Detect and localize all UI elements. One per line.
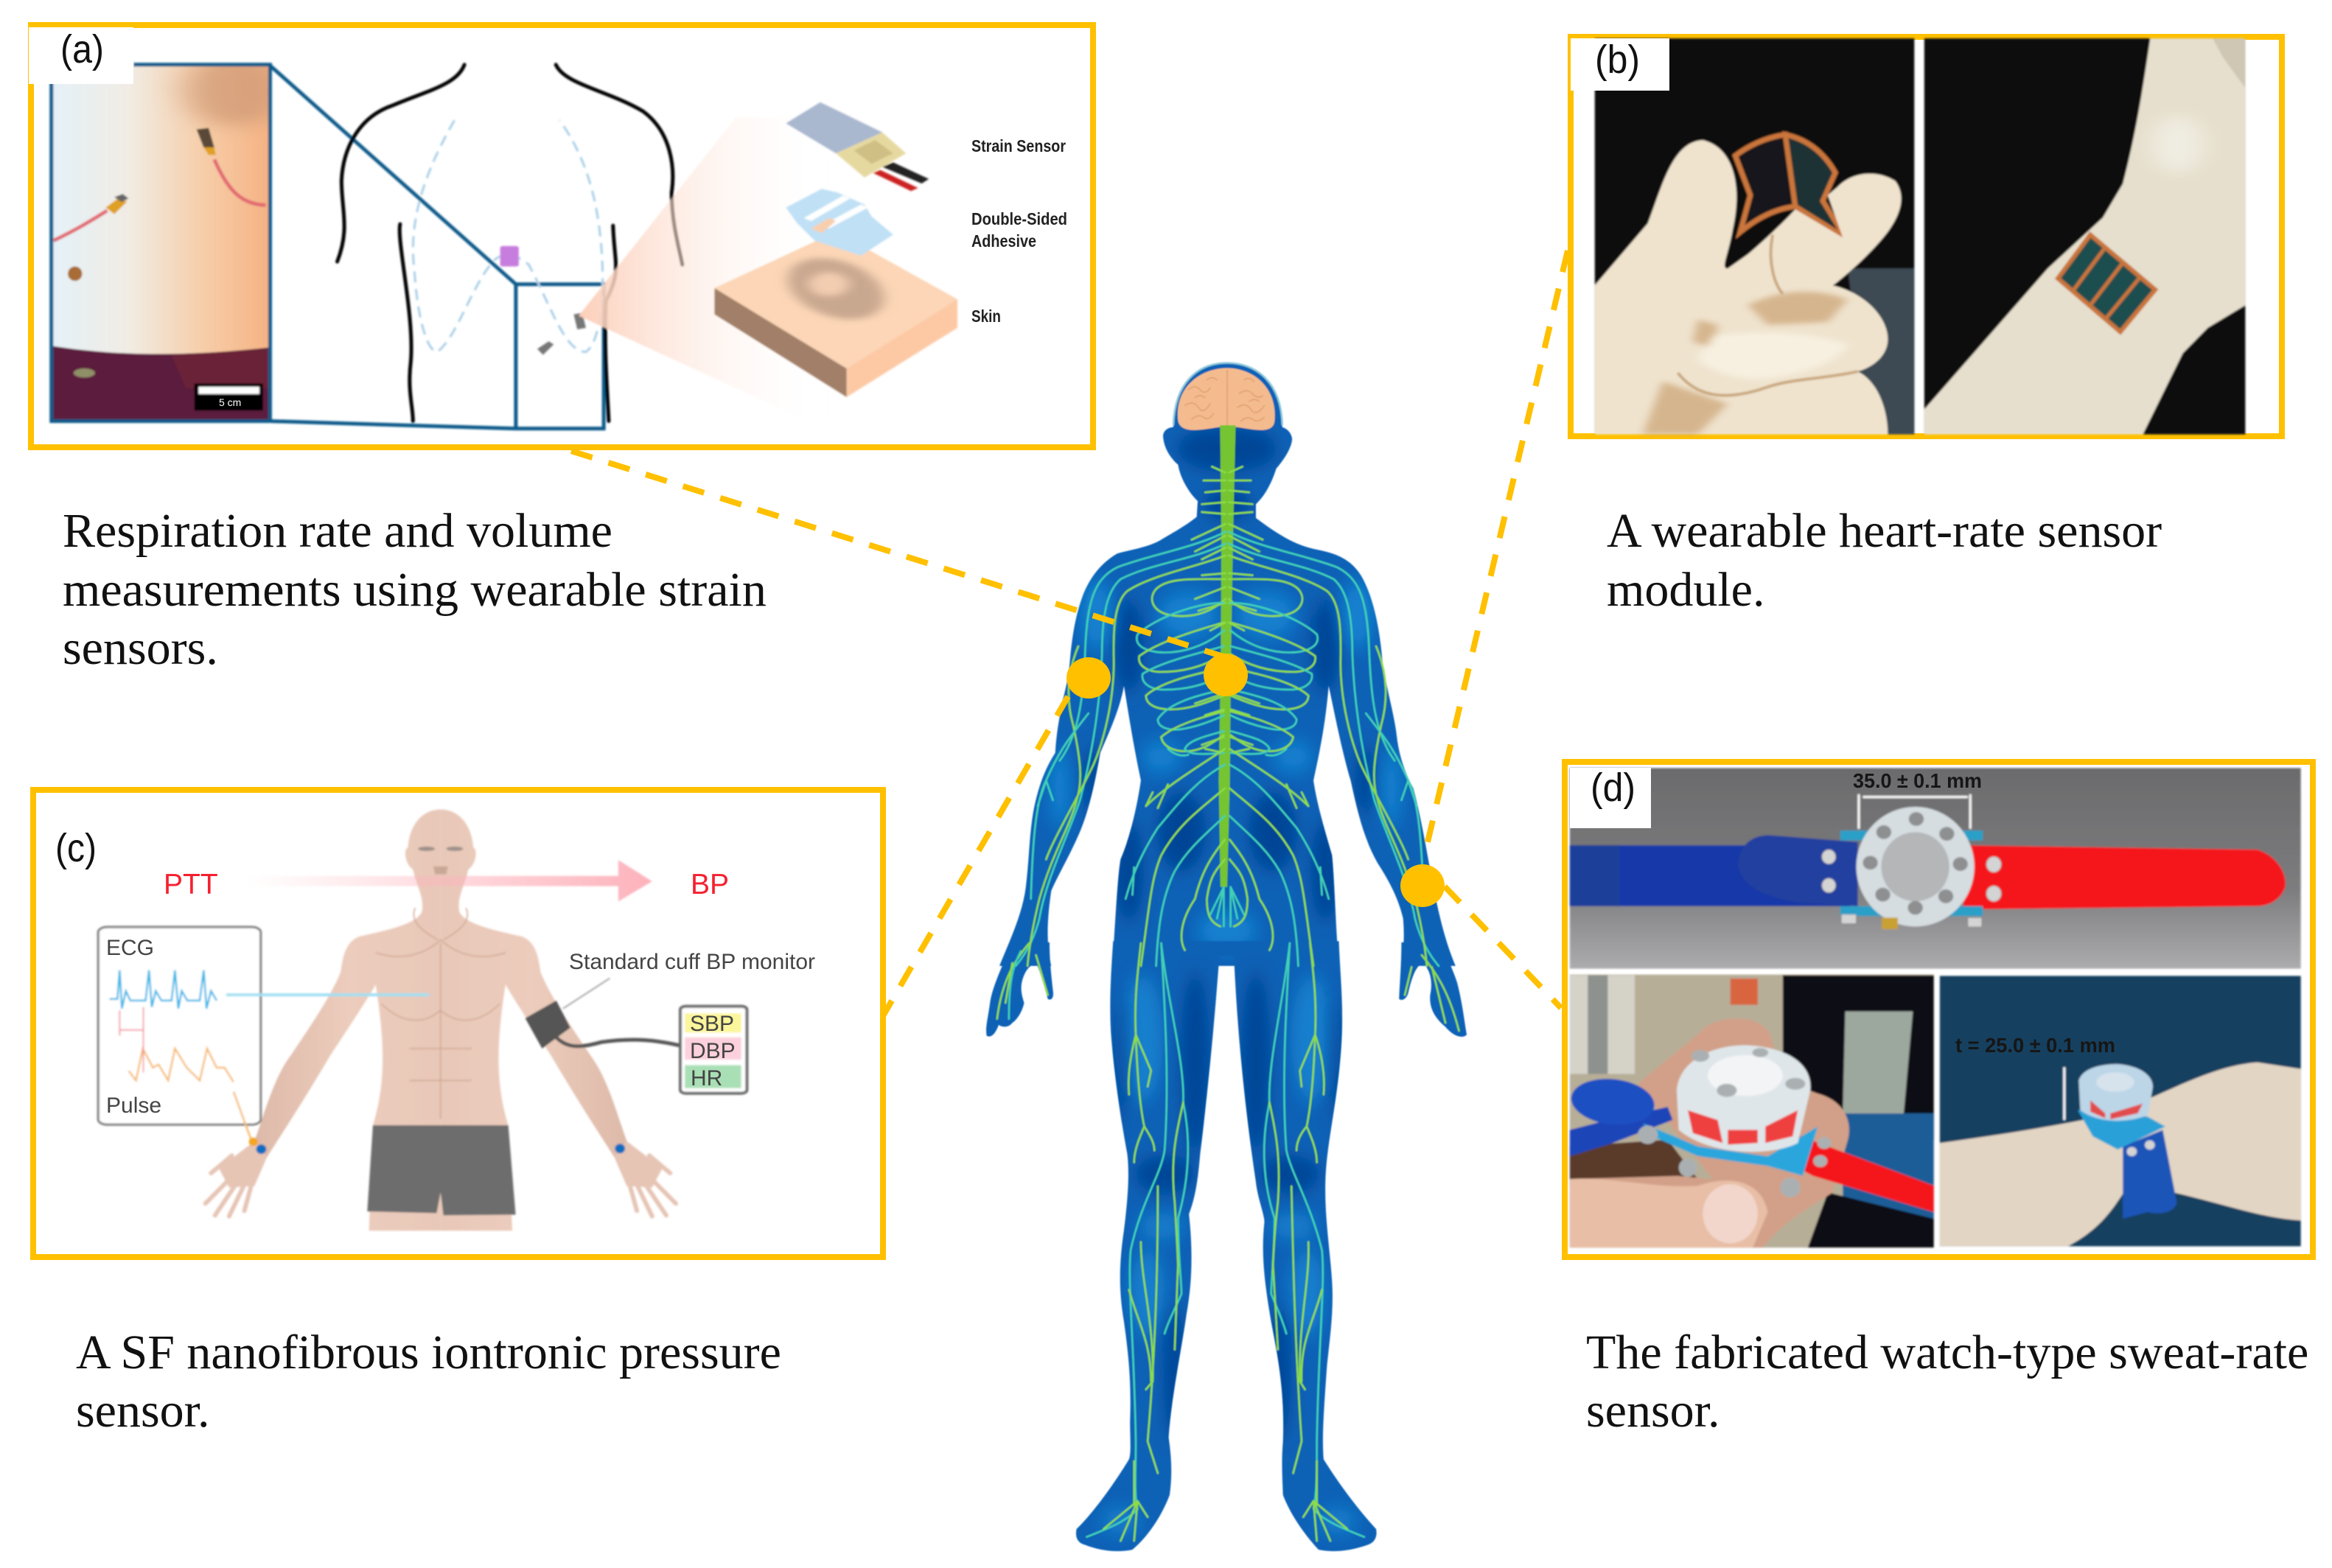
label patch	[1570, 768, 1651, 828]
ECG label: ECG	[106, 936, 154, 960]
BP label: BP	[691, 869, 729, 900]
caption b: A wearable heart-rate sensor	[1607, 504, 2162, 558]
marker: upper arm	[1066, 657, 1111, 699]
thickness dimension: t = 25.0 ± 0.1 mm	[1955, 1034, 2115, 1057]
label d: (d)	[1591, 766, 1635, 810]
dashed leader: panel a to chest	[571, 451, 1226, 657]
dashed leader: panel d to wrist	[1445, 886, 1561, 1008]
HR: HR	[691, 1066, 722, 1091]
label patch	[29, 27, 133, 84]
brain	[1178, 368, 1275, 430]
scale text: 5 cm	[219, 396, 241, 408]
label skin: Skin	[971, 307, 1001, 326]
nerves legs	[997, 943, 1459, 1541]
width dimension: 35.0 ± 0.1 mm	[1853, 769, 1982, 792]
caption d: The fabricated watch-type sweat-rate	[1586, 1326, 2308, 1379]
marker: chest	[1204, 654, 1248, 696]
human body nervous system figure	[986, 363, 1467, 1551]
pulse label: Pulse	[106, 1093, 161, 1118]
panel d: watch-type sweat-rate sensor	[1561, 762, 2313, 1257]
abdomen photo and body diagram	[52, 54, 957, 429]
caption a: sensors.	[63, 621, 218, 675]
sensor location markers	[1066, 654, 1445, 907]
nerves upper	[1016, 466, 1226, 966]
caption d: sensor.	[1586, 1384, 1720, 1438]
label a: (a)	[60, 27, 104, 71]
lower body silhouette	[986, 941, 1467, 1551]
spinal cord and brain	[1178, 368, 1275, 887]
caption a: measurements using wearable strain	[63, 563, 767, 617]
top photo	[1570, 768, 2301, 969]
bottom left photo	[1570, 975, 1934, 1247]
upper body silhouette	[999, 363, 1456, 966]
PTT label: PTT	[164, 869, 218, 900]
nerves upper mirrored	[1229, 466, 1439, 966]
label strain sensor: Strain Sensor	[971, 136, 1066, 155]
caption c: sensor.	[76, 1384, 209, 1438]
label adhesive line: Adhesive	[971, 231, 1036, 251]
label b: (b)	[1595, 38, 1640, 82]
caption a: Respiration rate and volume	[63, 504, 612, 558]
watch photographs	[1561, 768, 2301, 1247]
SBP: SBP	[690, 1012, 734, 1036]
spine	[1219, 425, 1235, 887]
panel c: iontronic pressure sensor	[33, 790, 883, 1257]
panel a: respiration strain sensors	[29, 25, 1093, 447]
panel b: heart-rate sensor photos	[1571, 37, 2282, 436]
bottom right photo	[1940, 976, 2301, 1246]
caption b: module.	[1607, 563, 1764, 617]
dashed leader: panel b to wrist	[1427, 251, 1568, 845]
DBP: DBP	[690, 1039, 736, 1063]
marker: wrist	[1400, 864, 1445, 907]
caption c: A SF nanofibrous iontronic pressure	[76, 1326, 781, 1379]
label double-sided adhesive: Double-Sided	[971, 209, 1067, 228]
dashed leader: panel c to arm	[881, 689, 1072, 1020]
anatomical figure with cuff	[98, 810, 747, 1231]
label c: (c)	[55, 826, 97, 870]
standard cuff label: Standard cuff BP monitor	[569, 950, 815, 974]
label patch	[1571, 38, 1669, 91]
photographs	[1595, 38, 2245, 434]
